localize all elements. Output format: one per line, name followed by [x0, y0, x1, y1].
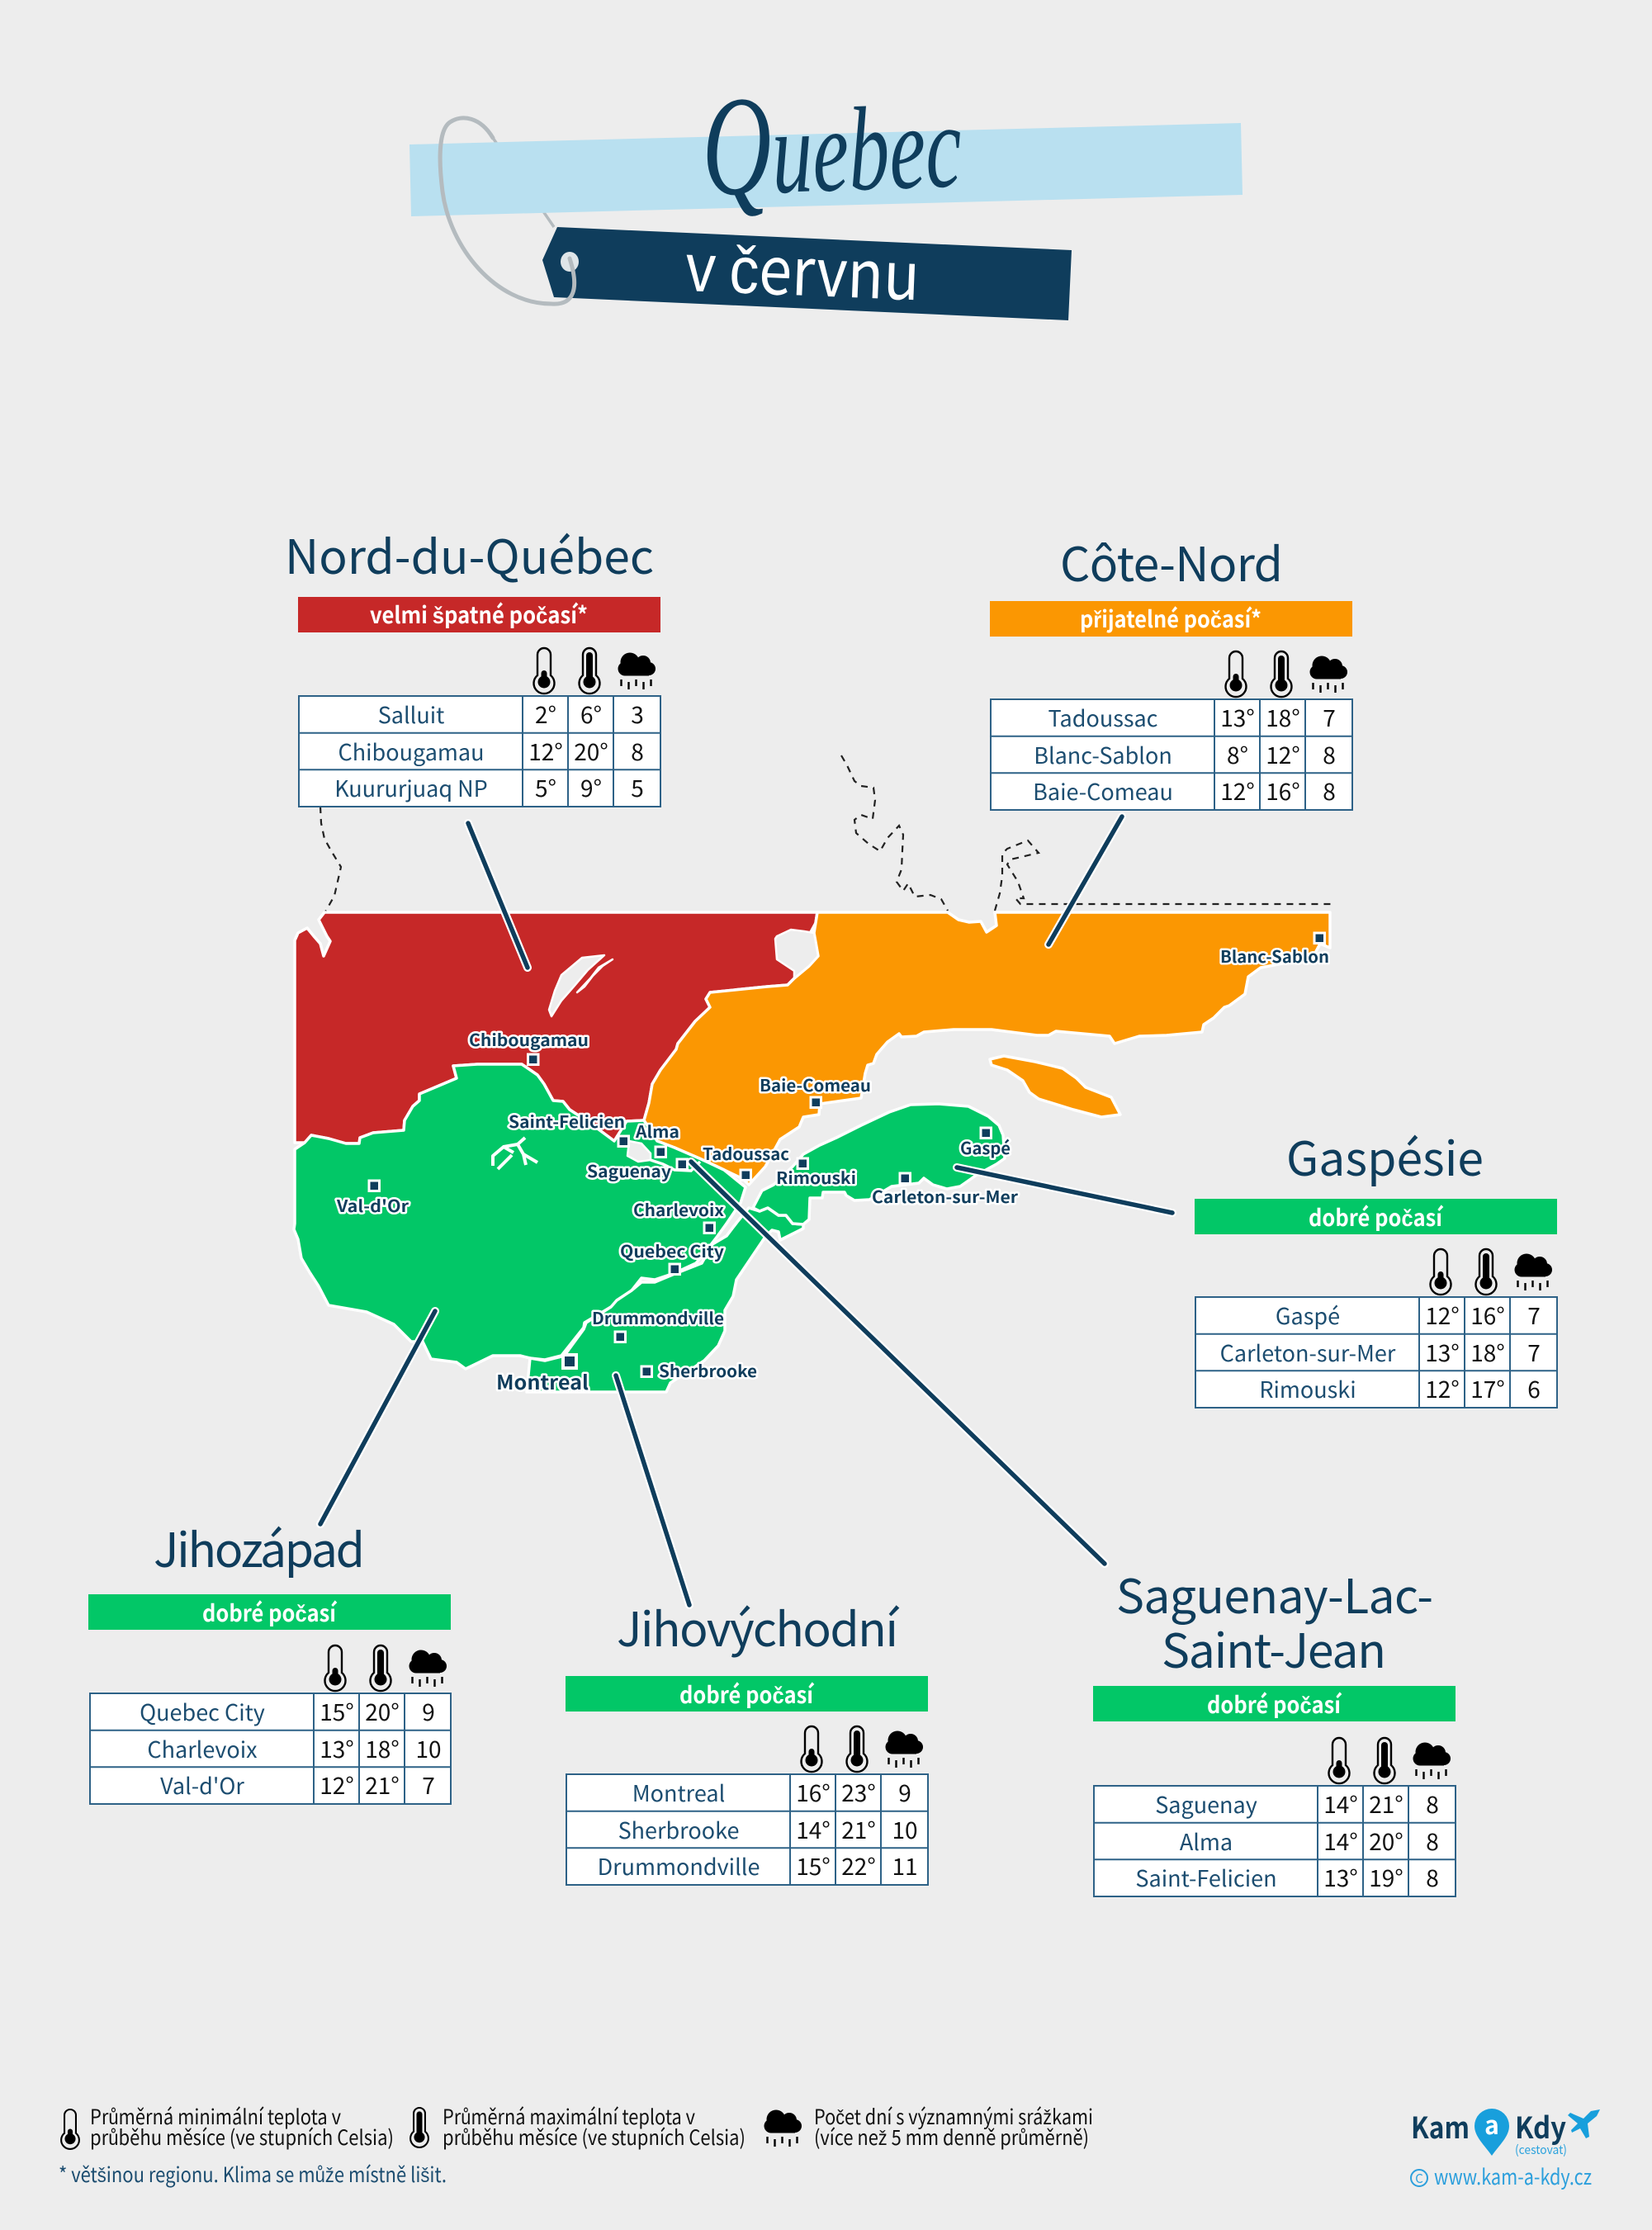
city: Blanc-Sablon: Blanc-Sablon — [1220, 944, 1329, 968]
weather rating bar — [1195, 1199, 1557, 1234]
city: Chibougamau — [469, 1027, 589, 1065]
wordmark: Kdy: Kdy — [1515, 2105, 1566, 2147]
lake: Albanel — [577, 959, 613, 992]
city: Sherbrooke: Sherbrooke — [659, 1358, 757, 1382]
data table: Sherbrooke — [618, 1813, 739, 1845]
data table: 6° — [580, 698, 602, 731]
weather rating bar: dobré počasí — [202, 1596, 337, 1629]
weather rating bar — [88, 1594, 451, 1630]
legend — [59, 2101, 1093, 2189]
data table: 12° — [1425, 1299, 1460, 1332]
callout line: Gaspésie — [957, 1167, 1172, 1213]
icon: minimum temperature — [61, 2109, 79, 2149]
city: Saint-Felicien — [509, 1109, 629, 1146]
data table: Drummondville — [598, 1849, 760, 1882]
data table: 5 — [631, 771, 644, 804]
legend text: minimum temperature: průběhu měsíce (ve stupních Celsia) — [90, 2122, 394, 2152]
data table: Carleton-sur-Mer — [1220, 1336, 1396, 1368]
data table: 7 — [1527, 1299, 1541, 1332]
city: Saint-Felicien: Saint-Felicien — [509, 1109, 625, 1133]
data table: 17° — [1470, 1372, 1505, 1405]
logo: Kam a Kdy — [1411, 2105, 1600, 2191]
heading: Nord-du-Québec — [285, 520, 654, 588]
region: Côte-Nord — [644, 912, 1330, 1185]
data table: 10 — [892, 1813, 918, 1846]
data table: Salluit — [378, 698, 444, 730]
data table: 8 — [631, 735, 644, 768]
data table: Blanc-Sablon — [1034, 738, 1172, 770]
data table: 18° — [365, 1732, 400, 1765]
icon: maximum temperature — [410, 2108, 428, 2147]
data table: 21° — [1369, 1787, 1403, 1820]
data table — [1195, 1249, 1557, 1408]
map of Quebec — [294, 755, 1331, 1605]
river: Saguenay — [651, 1160, 700, 1171]
tag: dark blue — [542, 227, 1072, 320]
city: Charlevoix — [633, 1197, 724, 1233]
data table: 10 — [415, 1732, 442, 1765]
city: Gaspé: Gaspé — [960, 1135, 1011, 1159]
data table — [90, 1645, 451, 1804]
data table: Val-d'Or — [160, 1768, 244, 1801]
data table: Quebec City — [140, 1695, 265, 1727]
data table: Gaspé — [1276, 1299, 1340, 1331]
data table: 15° — [320, 1695, 354, 1728]
data table: Rimouski — [1259, 1372, 1356, 1404]
city: Chibougamau: Chibougamau — [469, 1027, 589, 1051]
data table: 13° — [1220, 701, 1255, 734]
data table: Montreal — [632, 1776, 725, 1808]
data table: 18° — [1470, 1336, 1505, 1369]
subheading: v červnu: v červnu — [684, 215, 921, 320]
weather rating bar: velmi špatné počasí* — [370, 598, 588, 631]
data table: 20° — [1369, 1825, 1403, 1858]
data table: 2° — [535, 698, 556, 731]
city: Blanc-Sablon — [1220, 933, 1329, 968]
heading: Gaspésie — [1286, 1122, 1484, 1190]
lake: Saint-Jean — [627, 1141, 651, 1162]
heading: Côte-Nord — [1060, 528, 1283, 595]
weather rating bar: přijatelné počasí* — [1080, 602, 1261, 635]
icon: copyright: C — [1415, 2170, 1423, 2187]
city: Montreal: Montreal — [496, 1366, 589, 1395]
city: Tadoussac: Tadoussac — [703, 1141, 789, 1165]
title banner: light blue — [409, 123, 1243, 216]
data table: Chibougamau — [338, 735, 485, 767]
data table: Tadoussac — [1048, 701, 1157, 733]
lake: Hudson Bay inlet — [775, 930, 818, 978]
data table: 7 — [1527, 1336, 1541, 1369]
data table: 20° — [574, 735, 608, 768]
panel: Jihozápad — [88, 1513, 451, 1804]
data table: 13° — [1323, 1861, 1358, 1894]
data table: 16° — [1470, 1299, 1505, 1332]
border: dashed north-west — [320, 807, 341, 915]
data table — [566, 1726, 928, 1885]
city: Rimouski: Rimouski — [776, 1165, 856, 1189]
weather rating bar: dobré počasí — [1207, 1688, 1342, 1721]
data table: Saguenay — [1155, 1787, 1257, 1820]
callout line: Saguenay-Lac-Saint-Jean — [691, 1162, 1105, 1564]
data table: 12° — [1220, 774, 1255, 807]
data table: 22° — [841, 1849, 876, 1882]
weather rating bar — [566, 1676, 928, 1712]
data table: 8° — [1227, 738, 1248, 771]
legend text: maximum temperature: průběhu měsíce (ve stupních Celsia) — [443, 2122, 746, 2152]
wordmark: Kam: Kam — [1411, 2105, 1470, 2147]
lake: Mistassini — [549, 955, 604, 1016]
lake: Gouin reservoir — [493, 1138, 537, 1169]
data table: 9 — [898, 1776, 911, 1809]
data table: 19° — [1369, 1861, 1403, 1894]
city: Saguenay: Saguenay — [587, 1158, 672, 1182]
data table: Baie-Comeau — [1033, 774, 1173, 807]
data table: Alma — [1180, 1825, 1233, 1857]
data table: 12° — [528, 735, 563, 768]
data table — [1094, 1738, 1456, 1896]
border: dashed Labrador east — [995, 840, 1331, 911]
tag ring: front strand — [440, 118, 575, 304]
callout line: Nord-du-Québec — [468, 823, 528, 968]
data table — [991, 651, 1352, 810]
data table: Saint-Felicien — [1135, 1861, 1277, 1893]
data table: 16° — [796, 1776, 831, 1809]
city: Quebec City — [620, 1238, 725, 1275]
data table — [299, 648, 660, 807]
data table: 9 — [422, 1695, 435, 1728]
data table: Charlevoix — [147, 1732, 258, 1764]
icon: map pin with a: a — [1484, 2105, 1499, 2142]
icon: rainy days — [764, 2110, 802, 2147]
data table: 21° — [841, 1813, 876, 1846]
city: Baie-Comeau: Baie-Comeau — [760, 1072, 871, 1096]
data table: Kuururjuaq NP — [334, 771, 488, 803]
heading — [1116, 1560, 1433, 1682]
data table: 12° — [1266, 738, 1300, 771]
weather rating bar — [1093, 1686, 1456, 1721]
data table: 14° — [1323, 1787, 1358, 1820]
heading: Jihozápad — [154, 1513, 365, 1581]
wordmark: cestovat: (cestovat) — [1515, 2141, 1567, 2158]
city: Baie-Comeau — [760, 1072, 871, 1108]
heading: Jihovýchodní — [617, 1593, 899, 1660]
data table: 23° — [841, 1776, 876, 1809]
data table: 12° — [320, 1768, 354, 1802]
tag ring: rear strand — [493, 138, 554, 227]
icon: copyright — [1411, 2170, 1427, 2187]
panel: Côte-Nord — [990, 528, 1352, 810]
city: Drummondville: Drummondville — [592, 1305, 724, 1329]
data table: 11 — [892, 1849, 918, 1882]
data table: 15° — [796, 1849, 831, 1882]
legend text: rainy days: (více než 5 mm denně průměrně) — [814, 2122, 1089, 2152]
panel: Saguenay-Lac-Saint-Jean — [1093, 1560, 1456, 1896]
data table: 7 — [1323, 701, 1336, 734]
legend text: minimum temperature — [90, 2101, 394, 2152]
panel: Gaspésie — [1195, 1122, 1557, 1408]
data table: 9° — [580, 771, 602, 804]
border: dashed Labrador west — [841, 755, 948, 911]
callout line: Côte-Nord — [1048, 817, 1122, 945]
data table: 16° — [1266, 774, 1300, 807]
legend text: rainy days: Počet dní s významnými srážkami — [814, 2101, 1093, 2131]
data table: 13° — [320, 1732, 354, 1765]
data table: 8 — [1426, 1861, 1439, 1894]
callout line: Jihovýchodní — [616, 1375, 689, 1605]
panel: Jihovýchodní — [566, 1593, 928, 1885]
callout line: Jihozápad — [320, 1311, 435, 1524]
city: Alma: Alma — [635, 1119, 679, 1143]
website url: www.kam-a-kdy.cz — [1434, 2161, 1592, 2191]
data table: 3 — [631, 698, 644, 731]
data table: 8 — [1323, 738, 1336, 771]
region: Anticosti island — [990, 1056, 1120, 1117]
title block — [409, 59, 1243, 320]
footnote: * většinou regionu. Klima se může místně lišit. — [59, 2159, 447, 2189]
data table: 7 — [422, 1768, 435, 1802]
legend text: minimum temperature: Průměrná minimální teplota v — [90, 2101, 341, 2131]
data table: 14° — [796, 1813, 831, 1846]
weather rating bar — [298, 597, 660, 632]
city: Drummondville — [592, 1305, 724, 1342]
city: Carleton-sur-Mer — [872, 1173, 1018, 1208]
heading: Saguenay-Lac- — [1116, 1560, 1433, 1627]
legend text: maximum temperature — [443, 2101, 746, 2152]
data table: 13° — [1425, 1336, 1460, 1369]
legend text: rainy days — [814, 2101, 1093, 2152]
data table: 20° — [365, 1695, 400, 1728]
data table: 8 — [1323, 774, 1336, 807]
data table: 8 — [1426, 1825, 1439, 1858]
city: Alma — [635, 1119, 679, 1158]
heading: Saint-Jean — [1162, 1614, 1386, 1682]
heading: Quebec: Quebec — [699, 59, 963, 225]
city: Charlevoix: Charlevoix — [633, 1197, 724, 1221]
weather rating bar: dobré počasí — [679, 1678, 814, 1711]
tag hole — [561, 252, 579, 272]
city: Quebec City: Quebec City — [620, 1238, 725, 1262]
icon: map pin with a — [1474, 2105, 1509, 2156]
city: Carleton-sur-Mer: Carleton-sur-Mer — [872, 1184, 1018, 1208]
icon: airplane — [1568, 2109, 1600, 2138]
region: Nord-du-Québec — [295, 912, 818, 1143]
region: Jihozápad — [294, 1064, 746, 1369]
data table: 8 — [1426, 1787, 1439, 1820]
weather rating bar — [990, 601, 1352, 637]
city: Montreal — [496, 1355, 589, 1395]
data table: 6 — [1527, 1372, 1541, 1405]
data table: 12° — [1425, 1372, 1460, 1405]
data table: 14° — [1323, 1825, 1358, 1858]
weather rating bar: dobré počasí — [1309, 1200, 1443, 1233]
city: Val-d'Or: Val-d'Or — [336, 1193, 409, 1217]
city: Val-d'Or — [336, 1181, 409, 1217]
panel: Nord-du-Québec — [285, 520, 660, 807]
data table: 5° — [535, 771, 556, 804]
data table: 21° — [365, 1768, 400, 1802]
legend text: maximum temperature: Průměrná maximální teplota v — [443, 2101, 695, 2131]
city: Tadoussac — [703, 1141, 789, 1181]
region: Gaspésie — [753, 1104, 1005, 1224]
region: Jihovýchodní — [527, 1208, 803, 1392]
data table: 18° — [1266, 701, 1300, 734]
